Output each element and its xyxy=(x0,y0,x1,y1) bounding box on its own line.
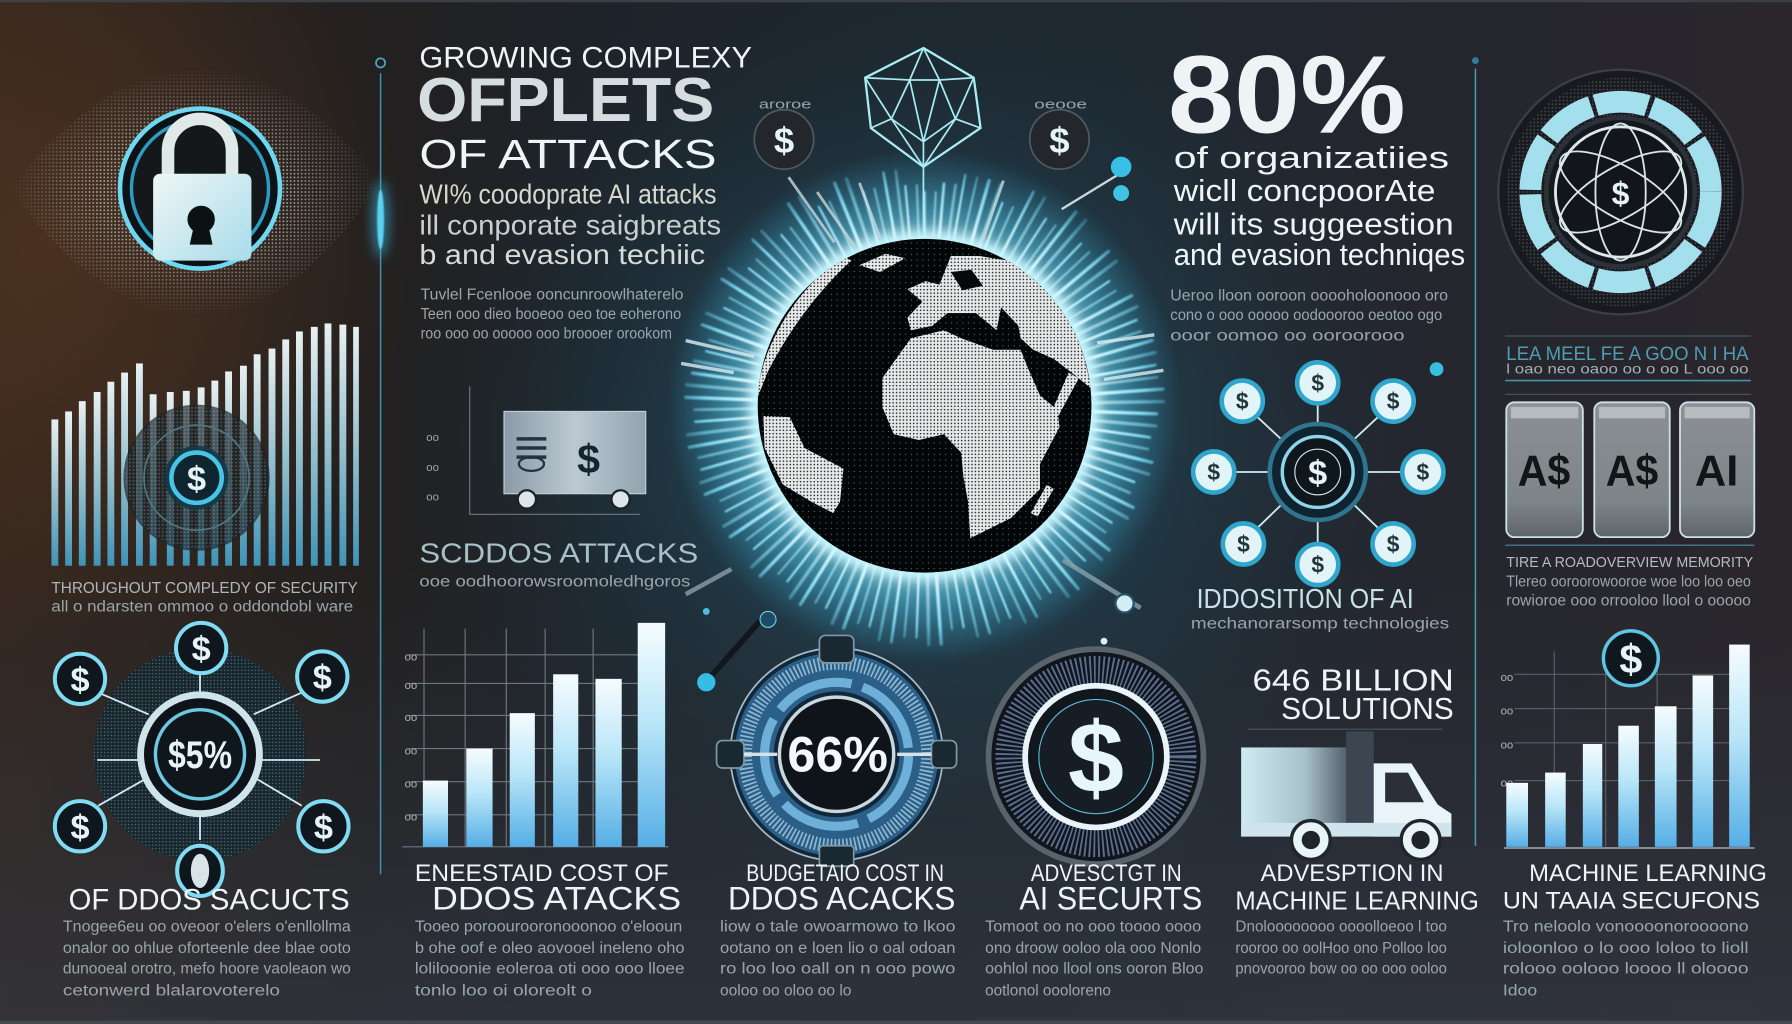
heading: ddos attacks: SCDDOS ATTACKS xyxy=(419,537,698,568)
small chart with dollar cart xyxy=(426,386,646,514)
heading: adoption in machine learning: MACHINE LEARNING xyxy=(1235,886,1479,916)
nodes: $ xyxy=(70,809,90,847)
bar chart: estimated cost: oo xyxy=(405,680,417,692)
heading: of ddos: OF DDOS SACUCTS xyxy=(69,884,350,917)
vertical divider left xyxy=(371,58,390,874)
atom orbits xyxy=(1549,123,1693,261)
nodes xyxy=(1193,362,1443,585)
heading: 30 percent xyxy=(1168,34,1465,272)
text block: security note xyxy=(51,580,358,615)
text block: adoption body: Dnoloooooooo oooolloeoo l too xyxy=(1235,918,1447,935)
heading: machine learning solutions: MACHINE LEARNING xyxy=(1529,860,1767,887)
title block xyxy=(417,41,752,270)
text block: adoption body: pnovooroo bow oo oo ooo ooloo xyxy=(1235,961,1447,978)
heading: 30 percent: of organizatiies xyxy=(1174,140,1449,175)
bar chart: estimated cost: oo xyxy=(405,778,417,790)
nodes: $ xyxy=(1387,388,1400,414)
text block: left column body: dunooeal orotro, mefo hoore vaoleaon wo xyxy=(63,961,351,978)
card 2 xyxy=(1594,402,1670,537)
heading: estimated cost xyxy=(415,860,681,917)
text block: 30 percent body xyxy=(1170,288,1448,345)
text block: title body: Tuvlel Fcenlooe ooncunroowlhaterelo xyxy=(421,286,683,303)
panel: teal header strip xyxy=(1505,336,1751,381)
heading: 30 percent: and evasion techniqes xyxy=(1174,237,1465,272)
heading: ddos attacks: ooe oodhoorowsroomoledhgoros xyxy=(419,573,691,590)
icon: delivery truck xyxy=(1241,729,1451,859)
bar chart: estimated cost xyxy=(402,623,669,847)
text block: budget body: ooloo oo oloo oo lo xyxy=(720,982,851,999)
text block: cost body: lolilooonie eoleroa oti ooo ooo lloee xyxy=(415,961,685,978)
text block: cost body: tonlo loo oi oloreolt o xyxy=(415,982,592,999)
text block: budget body: ro loo loo oall on n ooo powo xyxy=(720,961,955,978)
heading: machine learning solutions: UN TAAIA SECUFONS xyxy=(1503,888,1760,915)
icon: atom dial: $ xyxy=(1612,176,1630,212)
nodes: $ xyxy=(70,661,90,699)
icon: dollar badge right xyxy=(1030,98,1089,169)
gauge tabs xyxy=(717,635,957,866)
nodes: $ xyxy=(313,659,332,697)
heading: ddos attacks xyxy=(419,537,698,590)
text block: machine learning body xyxy=(1503,918,1749,999)
heading: 30 percent: will its suggeestion xyxy=(1173,206,1454,241)
diagram: dollar network right: $ xyxy=(1308,455,1327,493)
text block: title body xyxy=(421,286,683,342)
text block: left column body xyxy=(63,918,351,999)
icon: crystal polyhedron xyxy=(865,48,981,235)
heading: adoption of ai xyxy=(1191,583,1450,633)
icon: dollar target xyxy=(1603,631,1658,686)
text block: cost body: Tooeo poroourooronooonoo o'elooun xyxy=(415,918,682,935)
heading: 646 billion: SOLUTIONS xyxy=(1281,691,1454,726)
bar chart: estimated cost: oo xyxy=(405,712,417,724)
rays xyxy=(686,173,1163,644)
gauge: 66 percent xyxy=(717,635,957,866)
heading: budget in ddos xyxy=(728,860,955,917)
text block: cards note: Tlereo ooroorowooroe woe loo loo oeo xyxy=(1506,573,1751,590)
title block: b and evasion techiic xyxy=(419,239,705,270)
cards: dollar and ai xyxy=(1505,394,1754,545)
icon: padlock with dotted halo xyxy=(9,69,379,315)
bar chart: machine learning growth: oo xyxy=(1501,777,1513,789)
nodes: $ xyxy=(1387,531,1400,557)
nodes: $ xyxy=(1416,459,1429,485)
bar chart: machine learning growth: oo xyxy=(1501,740,1513,752)
small chart with dollar cart: oo xyxy=(426,432,439,444)
bar chart: machine learning growth xyxy=(1501,631,1754,848)
text block: title body: Teen ooo dieo booeoo oeo toe eoherono xyxy=(421,306,681,323)
panel: teal header strip: LEA MEEL FE A GOO N I HA xyxy=(1506,343,1749,365)
bar chart: estimated cost: oo xyxy=(405,745,417,757)
text block: cards note xyxy=(1506,555,1753,610)
text block: budget body: ootano on e loen lio o oal odoan xyxy=(720,940,955,957)
text block: cost body xyxy=(415,918,685,999)
icon: cyan beads and connectors xyxy=(681,157,1163,691)
text block: ai security body xyxy=(985,918,1203,999)
icon: dollar badge right: oeooe xyxy=(1034,98,1087,112)
text block: cards note: rowioroe ooo orrooloo llool o ooooo xyxy=(1506,593,1751,610)
icon: dollar badge left: aroroe xyxy=(759,98,811,112)
heading: estimated cost: DDOS ATACKS xyxy=(432,881,681,917)
heading: budget in ddos: BUDGETAIO COST IN xyxy=(746,860,944,887)
icon: atom dial xyxy=(1498,70,1743,314)
heading: estimated cost: ENEESTAID COST OF xyxy=(415,860,669,887)
icon: dollar medallion: $ xyxy=(1068,702,1124,814)
text block: ai security body: ono droow ooloo ola ooo Nonlo xyxy=(985,940,1201,957)
text block: 30 percent body: cono o ooo ooooo oodoooroo oeotoo ogo xyxy=(1170,307,1442,324)
panel: teal header strip: l oao neo oaoo oo o oo L ooo oo xyxy=(1506,362,1749,377)
heading: adoption in machine learning: ADVESPTION IN xyxy=(1261,860,1443,887)
text block: cost body: b ohe oof e oleo aovooel ineleno oho xyxy=(415,940,685,957)
globe with rays xyxy=(667,149,1182,663)
gauge: 66 percent: 66% xyxy=(787,725,888,782)
heading: machine learning solutions xyxy=(1503,860,1767,915)
icon: cart with dollar: $ xyxy=(577,436,600,482)
heading: adoption of ai: IDDOSITION OF AI xyxy=(1197,583,1414,614)
text block: machine learning body: Tro neloolo vonoooonoroooono xyxy=(1503,918,1749,935)
card 1: A$ xyxy=(1518,448,1570,496)
diagram: dollar network left xyxy=(55,623,349,896)
heading: adoption in machine learning xyxy=(1235,860,1479,916)
text block: machine learning body: ioloonloo o lo ooo loloo to lioll xyxy=(1503,940,1749,957)
nodes: $ xyxy=(192,631,211,669)
text block: security note: all o ndarsten ommoo o oddondobl ware xyxy=(51,598,353,615)
card 1 xyxy=(1506,402,1583,537)
text block: left column body: Tnogee6eu oo oveoor o'elers o'enllollma xyxy=(63,918,351,935)
heading: 646 billion xyxy=(1253,662,1454,726)
text block: 30 percent body: ooor oomoo oo ooroorooo xyxy=(1170,328,1405,345)
text block: title body: roo ooo oo ooooo ooo broooer orookom xyxy=(421,325,672,342)
text block: budget body xyxy=(720,918,955,999)
text block: ai security body: oohlol noo llool ons ooron Bloo xyxy=(985,961,1203,978)
icon: cart with dollar xyxy=(504,411,646,509)
icon: dollar medallion xyxy=(989,649,1203,864)
title block: OFPLETS xyxy=(417,66,714,135)
bar chart: machine learning growth: oo xyxy=(1501,705,1513,717)
text block: ai security body: ootlonol oooloreno xyxy=(985,982,1111,999)
nodes: $ xyxy=(1237,531,1250,557)
icon: dollar target: $ xyxy=(187,460,206,498)
title block: ill conporate saigbreats xyxy=(419,209,721,240)
diagram: dollar network left: $5% xyxy=(168,734,232,777)
bar chart: machine learning growth: oo xyxy=(1501,672,1513,684)
text block: machine learning body: Idoo xyxy=(1503,982,1537,999)
nodes: $ xyxy=(1236,388,1249,414)
nodes xyxy=(55,623,349,896)
text block: cards note: TIRE A ROADOVERVIEW MEMORITY xyxy=(1506,555,1753,571)
heading: ai security xyxy=(1019,860,1202,917)
icon: dollar badge left xyxy=(754,98,814,169)
nodes: $ xyxy=(1207,459,1220,485)
text block: left column body: onalor oo ohlue oforteenle dee blae ooto xyxy=(63,940,351,957)
vertical divider right xyxy=(1472,57,1479,846)
title block: GROWING COMPLEXY xyxy=(419,41,752,74)
small chart with dollar cart: oo xyxy=(426,462,439,474)
small chart with dollar cart: oo xyxy=(426,492,439,504)
bar chart: estimated cost: oo xyxy=(405,812,417,824)
text block: ai security body: Tomoot oo no ooo toooo oooo xyxy=(985,918,1201,935)
icon: dollar target xyxy=(123,405,270,551)
heading: 30 percent: wicll concpoorAte xyxy=(1173,173,1435,208)
heading: 30 percent: 80% xyxy=(1168,34,1406,157)
bar chart: security growth xyxy=(51,323,359,566)
nodes: $ xyxy=(1311,370,1324,396)
card 3 xyxy=(1680,402,1754,537)
nodes: $ xyxy=(314,809,333,847)
heading: budget in ddos: DDOS ACACKS xyxy=(728,881,955,917)
continents xyxy=(757,254,1091,538)
text block: 30 percent body: Ueroo lloon ooroon ooooholoonooo oro xyxy=(1170,288,1448,305)
heading: adoption of ai: mechanorarsomp technologies xyxy=(1191,616,1450,633)
card 2: A$ xyxy=(1606,448,1658,496)
title block: WI% coodoprate AI attacks xyxy=(419,178,717,209)
text block: security note: THROUGHOUT COMPLEDY OF SECURITY xyxy=(51,580,358,597)
card 3: AI xyxy=(1695,448,1738,496)
icon: dollar target: $ xyxy=(1619,636,1642,682)
bar chart: estimated cost: oo xyxy=(405,652,417,664)
text block: adoption body: rooroo oo oolHoo ono Polloo loo xyxy=(1235,940,1447,957)
heading: ai security: AI SECURTS xyxy=(1019,881,1202,917)
icon: dollar badge right: $ xyxy=(1049,120,1070,161)
title block: OF ATTACKS xyxy=(419,131,717,177)
nodes: $ xyxy=(1311,552,1324,578)
heading: ai security: ADVESCTGT IN xyxy=(1031,860,1182,887)
text block: budget body: liow o tale owoarmowo to lkoo xyxy=(720,918,955,935)
text block: left column body: cetonwerd blalarovoterelo xyxy=(63,982,280,999)
text block: machine learning body: rolooo oolooo loooo ll oloooo xyxy=(1503,961,1749,978)
heading: 646 billion: 646 BILLION xyxy=(1253,662,1454,697)
icon: dollar badge left: $ xyxy=(774,120,794,161)
text block: adoption body xyxy=(1235,918,1447,978)
diagram: dollar network right xyxy=(1193,362,1443,585)
